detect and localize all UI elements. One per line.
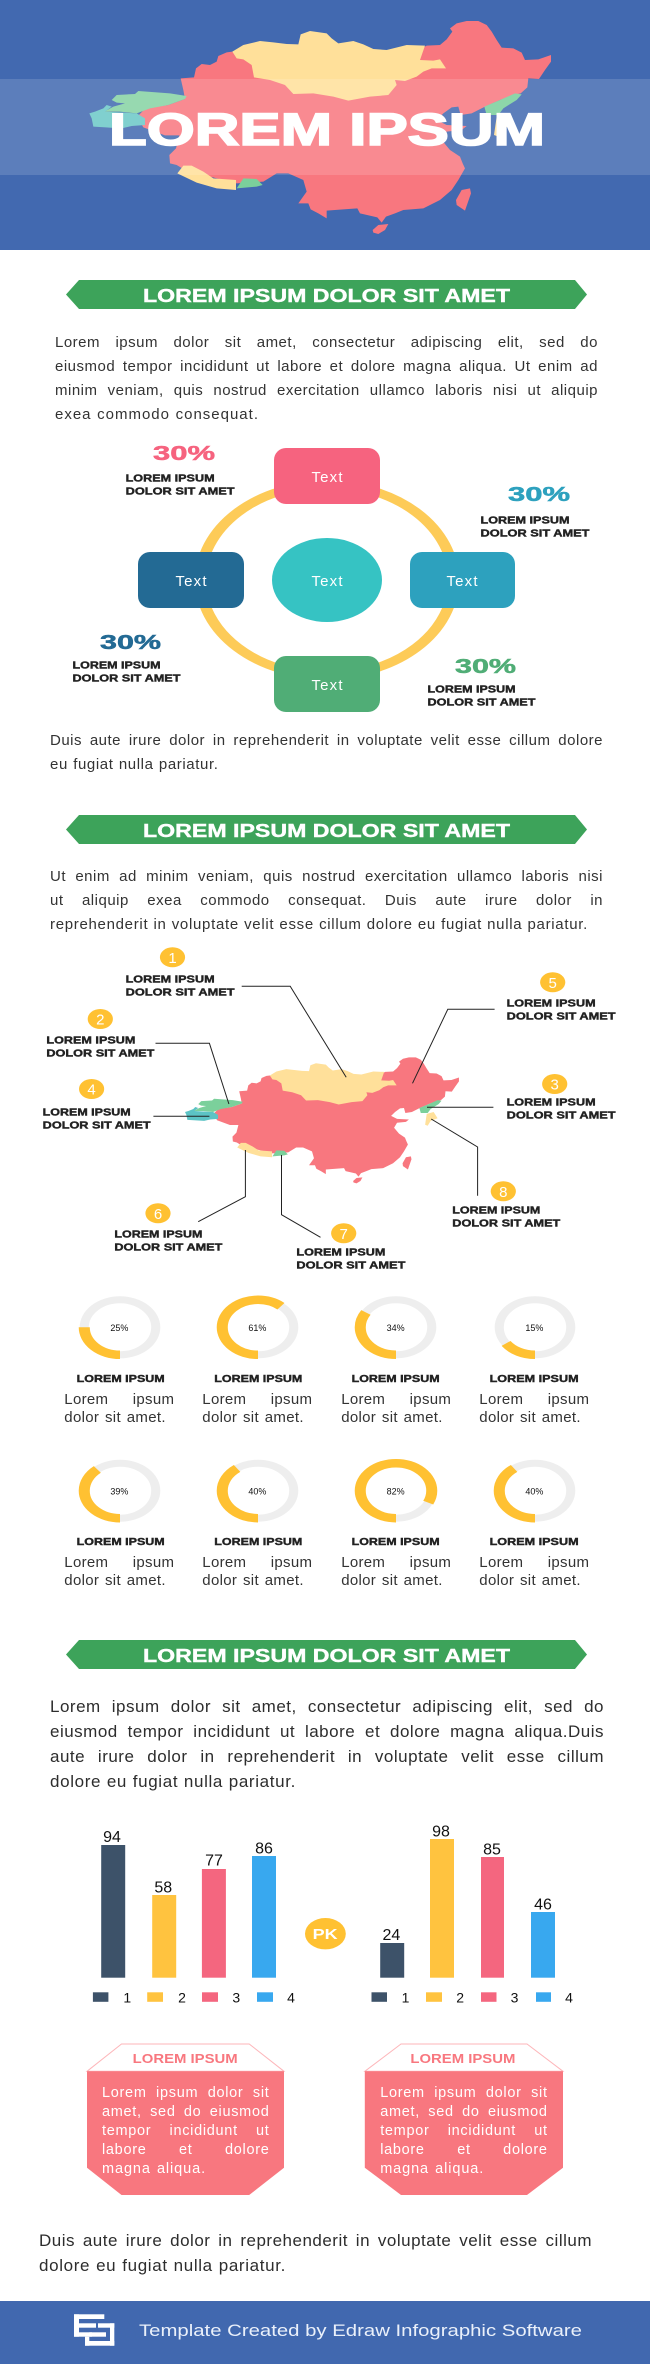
text: donut description 6 — [202, 1554, 312, 1589]
panel: right octagon: LOREM IPSUM — [410, 2051, 515, 2066]
map label 6: LOREM IPSUM — [114, 1230, 202, 1241]
small map — [185, 1057, 459, 1183]
ring diagram — [138, 448, 515, 712]
donut 25% — [77, 1300, 165, 1385]
map label 1: DOLOR SIT AMET — [126, 988, 235, 999]
callout: bottom right 30%: LOREM IPSUM — [428, 684, 516, 695]
legend: right: 2 — [456, 1990, 464, 2006]
text block: paragraph under ring: Duis aute irure dolor in reprehenderit in voluptate velit esse cillum dolore — [50, 732, 603, 749]
map label 6 — [114, 1203, 222, 1254]
box: bottom — [274, 656, 380, 712]
bar chart: right: 46 — [534, 1896, 552, 1914]
box: left: Text — [176, 573, 207, 590]
text: donut description 1: dolor sit amet. — [64, 1409, 166, 1426]
donut 39% — [77, 1463, 165, 1548]
section heading 2 — [66, 815, 587, 844]
legend: right: 4 — [565, 1990, 573, 2006]
text block: intro paragraph: exea commodo consequat. — [55, 406, 259, 423]
map label 4: LOREM IPSUM — [43, 1108, 131, 1119]
map label 7 — [296, 1223, 405, 1272]
map label 7: DOLOR SIT AMET — [296, 1261, 405, 1272]
map label 5: DOLOR SIT AMET — [507, 1012, 616, 1023]
legend: left — [93, 1990, 295, 2006]
legend: right — [372, 1990, 573, 2006]
text: donut description 3: dolor sit amet. — [341, 1409, 443, 1426]
text block: map intro paragraph: Ut enim ad minim veniam, quis nostrud exercitation ullamco laboris nisi — [50, 868, 603, 885]
callout: top right 30%: LOREM IPSUM — [480, 515, 570, 526]
map label 4 — [43, 1079, 151, 1132]
callout: bottom left 30%: 30% — [100, 632, 161, 654]
text: left octagon body: amet, sed do eiusmod — [102, 2104, 270, 2120]
text: donut description 2: dolor sit amet. — [202, 1409, 304, 1426]
map label 3 — [507, 1074, 616, 1122]
section heading 3: LOREM IPSUM DOLOR SIT AMET — [143, 1646, 510, 1666]
callout: bottom right 30%: 30% — [455, 656, 516, 678]
footer text: Template Created by Edraw Infographic Software — [139, 2321, 582, 2340]
callout: bottom left 30% — [72, 632, 180, 684]
bar chart: left — [93, 1829, 295, 2006]
text: left octagon body: Lorem ipsum dolor sit — [102, 2085, 270, 2101]
donut 25%: 25% — [110, 1323, 128, 1333]
bar chart: left: 77 — [205, 1852, 223, 1870]
box: right: Text — [446, 573, 478, 590]
panel: right octagon — [365, 2044, 563, 2195]
donut 34%: LOREM IPSUM — [352, 1374, 440, 1385]
callout: top right 30% — [480, 484, 590, 540]
text block: chart intro paragraph — [50, 1696, 604, 1791]
text: donut description 7: Lorem ipsum — [341, 1554, 451, 1571]
donut 40%: 40% — [248, 1486, 266, 1496]
text: donut description 2: Lorem ipsum — [202, 1391, 312, 1408]
text: donut description 6: Lorem ipsum — [202, 1554, 312, 1571]
text: donut description 1 — [64, 1391, 174, 1426]
text: right octagon body: amet, sed do eiusmod — [380, 2104, 548, 2120]
center ellipse: Text — [312, 573, 343, 590]
text: right octagon body: tempor incididunt ut — [380, 2123, 548, 2139]
callout: top left 30%: DOLOR SIT AMET — [126, 487, 235, 498]
donut 61%: 61% — [248, 1323, 266, 1333]
callout: top left 30%: 30% — [153, 443, 215, 465]
text: donut description 6: dolor sit amet. — [202, 1572, 304, 1589]
bar chart: right: 98 — [432, 1824, 450, 1840]
box: top: Text — [312, 469, 343, 486]
text block: paragraph under ring — [50, 732, 603, 773]
bar chart: right: 24 — [383, 1927, 400, 1944]
map label 7: 7 — [340, 1226, 348, 1243]
text: donut description 8: Lorem ipsum — [479, 1554, 589, 1571]
map label 5: 5 — [549, 975, 557, 992]
section heading 1: LOREM IPSUM DOLOR SIT AMET — [143, 286, 510, 306]
donut 61%: LOREM IPSUM — [214, 1374, 302, 1385]
map label 8: DOLOR SIT AMET — [452, 1219, 560, 1230]
bar chart: left: 94 — [103, 1829, 121, 1846]
donut 82%: 82% — [387, 1486, 405, 1496]
donut 40%: LOREM IPSUM — [214, 1537, 302, 1548]
callout: top right 30%: 30% — [508, 484, 570, 506]
bar chart: right — [372, 1824, 573, 2006]
map label 8: LOREM IPSUM — [452, 1206, 540, 1217]
text: donut description 3: Lorem ipsum — [341, 1391, 451, 1408]
map label 6: 6 — [154, 1206, 162, 1223]
text block: paragraph under ring: eu fugiat nulla pariatur. — [50, 756, 218, 773]
text block: chart intro paragraph: aute irure dolor in reprehenderit in voluptate velit esse cillum — [50, 1747, 604, 1766]
text: donut description 4: dolor sit amet. — [479, 1409, 581, 1426]
map label 3: DOLOR SIT AMET — [507, 1111, 616, 1122]
text block: intro paragraph: Lorem ipsum dolor sit amet, consectetur adipiscing elit, sed do — [55, 334, 598, 351]
donut 61% — [214, 1300, 302, 1385]
text: donut description 5: Lorem ipsum — [64, 1554, 174, 1571]
text block: chart intro paragraph: Lorem ipsum dolor sit amet, consectetur adipiscing elit, sed do — [50, 1696, 604, 1716]
callout: top right 30%: DOLOR SIT AMET — [480, 529, 590, 540]
map label 7: LOREM IPSUM — [296, 1248, 385, 1259]
bar chart: left: 86 — [255, 1840, 273, 1858]
text block: intro paragraph — [55, 334, 598, 423]
text block: map intro paragraph: reprehenderit in voluptate velit esse cillum dolore eu fugiat nulla pariatur. — [50, 916, 588, 933]
callout: top left 30%: LOREM IPSUM — [126, 474, 215, 484]
donut 15%: 15% — [525, 1323, 543, 1333]
donut 39%: LOREM IPSUM — [77, 1537, 165, 1548]
text block: chart intro paragraph: dolore eu fugiat nulla pariatur. — [50, 1772, 296, 1791]
text block: closing paragraph: dolore eu fugiat nulla pariatur. — [39, 2256, 286, 2274]
map label 1: 1 — [168, 950, 177, 967]
header banner — [0, 0, 650, 250]
box: left — [138, 552, 244, 608]
text: donut description 2 — [202, 1391, 312, 1426]
map label 2: LOREM IPSUM — [46, 1036, 135, 1047]
icon: edraw logo — [74, 2314, 114, 2346]
donut 39%: 39% — [110, 1486, 128, 1496]
legend: right: 3 — [511, 1990, 519, 2006]
PK badge: PK — [313, 1926, 338, 1943]
title: LOREM IPSUM — [109, 104, 545, 155]
map leader lines — [153, 986, 495, 1237]
text: left octagon body: magna aliqua. — [102, 2161, 206, 2177]
text block: closing paragraph: Duis aute irure dolor in reprehenderit in voluptate velit esse cillum — [39, 2230, 592, 2250]
text: right octagon body: Lorem ipsum dolor sit — [380, 2085, 548, 2101]
map label 2: DOLOR SIT AMET — [46, 1049, 154, 1060]
text: donut description 7 — [341, 1554, 451, 1589]
text: donut description 8 — [479, 1554, 589, 1589]
map label 4: DOLOR SIT AMET — [43, 1121, 151, 1132]
text block: closing paragraph — [39, 2230, 592, 2274]
panel: left octagon — [87, 2044, 284, 2195]
donut 25%: LOREM IPSUM — [77, 1374, 165, 1385]
footer — [0, 2301, 650, 2364]
map label 8 — [452, 1181, 560, 1230]
callout: bottom left 30%: DOLOR SIT AMET — [72, 673, 180, 684]
callout: bottom right 30%: DOLOR SIT AMET — [428, 697, 536, 708]
panel: left octagon: LOREM IPSUM — [133, 2051, 238, 2066]
PK badge — [305, 1918, 346, 1949]
text: donut description 4: Lorem ipsum — [479, 1391, 589, 1408]
donut 34% — [352, 1300, 440, 1385]
donut 82% — [352, 1463, 440, 1548]
donut 40% second: LOREM IPSUM — [490, 1537, 579, 1548]
donut 40% second: 40% — [525, 1486, 543, 1496]
callout: top left 30% — [126, 443, 235, 498]
map label 6: DOLOR SIT AMET — [114, 1243, 222, 1254]
map label 1 — [126, 947, 235, 999]
center ellipse — [272, 538, 382, 622]
text: left octagon body: labore et dolore — [102, 2142, 270, 2158]
callout: bottom right 30% — [428, 656, 536, 708]
callout: bottom left 30%: LOREM IPSUM — [72, 660, 160, 671]
text: donut description 1: Lorem ipsum — [64, 1391, 174, 1408]
text: donut description 5: dolor sit amet. — [64, 1572, 166, 1589]
legend: right: 1 — [402, 1990, 410, 2006]
section heading 3 — [66, 1640, 587, 1669]
text: donut description 3 — [341, 1391, 451, 1426]
text: donut description 8: dolor sit amet. — [479, 1572, 581, 1589]
map label 4: 4 — [87, 1082, 96, 1098]
text: right octagon body: magna aliqua. — [380, 2161, 484, 2177]
legend: left: 4 — [287, 1990, 295, 2006]
map label 3: LOREM IPSUM — [507, 1098, 596, 1109]
section heading 1 — [66, 280, 587, 309]
donut 40% second — [490, 1463, 579, 1548]
text block: chart intro paragraph: eiusmod tempor incididunt ut labore et dolore magna aliqua.Duis — [50, 1722, 604, 1741]
map label 8: 8 — [499, 1184, 507, 1201]
legend: left: 1 — [123, 1990, 131, 2006]
map label 2 — [46, 1009, 154, 1060]
donut 15% — [490, 1300, 579, 1385]
map label 5 — [507, 972, 616, 1023]
map label 2: 2 — [96, 1012, 104, 1028]
text: left octagon body — [102, 2085, 270, 2177]
text block: intro paragraph: eiusmod tempor incididunt ut labore et dolore magna aliqua. Ut enim ad — [55, 358, 598, 375]
donut 82%: LOREM IPSUM — [352, 1537, 440, 1548]
map label 1: LOREM IPSUM — [126, 975, 215, 986]
box: top — [274, 448, 380, 504]
text: left octagon body: tempor incididunt ut — [102, 2123, 270, 2139]
donut 40% — [214, 1463, 302, 1548]
text: right octagon body: labore et dolore — [380, 2142, 548, 2158]
header map — [89, 21, 551, 234]
map label 5: LOREM IPSUM — [507, 999, 596, 1010]
legend: left: 2 — [178, 1990, 186, 2006]
text: donut description 5 — [64, 1554, 174, 1589]
donut 15%: LOREM IPSUM — [490, 1374, 579, 1385]
text: donut description 4 — [479, 1391, 589, 1426]
bar chart: right: 85 — [483, 1842, 501, 1858]
donut 34%: 34% — [387, 1323, 405, 1333]
text block: map intro paragraph — [50, 868, 603, 933]
legend: left: 3 — [232, 1990, 240, 2006]
box: bottom: Text — [312, 677, 343, 694]
text block: intro paragraph: minim veniam, quis nostrud exercitation ullamco laboris nisi ut aliquip — [55, 382, 598, 399]
bar chart: left: 58 — [154, 1880, 172, 1896]
map label 3: 3 — [551, 1076, 559, 1094]
text block: map intro paragraph: ut aliquip exea commodo consequat. Duis aute irure dolor in — [50, 892, 603, 909]
box: right — [410, 552, 515, 608]
text: right octagon body — [380, 2085, 548, 2177]
section heading 2: LOREM IPSUM DOLOR SIT AMET — [143, 821, 510, 841]
text: donut description 7: dolor sit amet. — [341, 1572, 443, 1589]
